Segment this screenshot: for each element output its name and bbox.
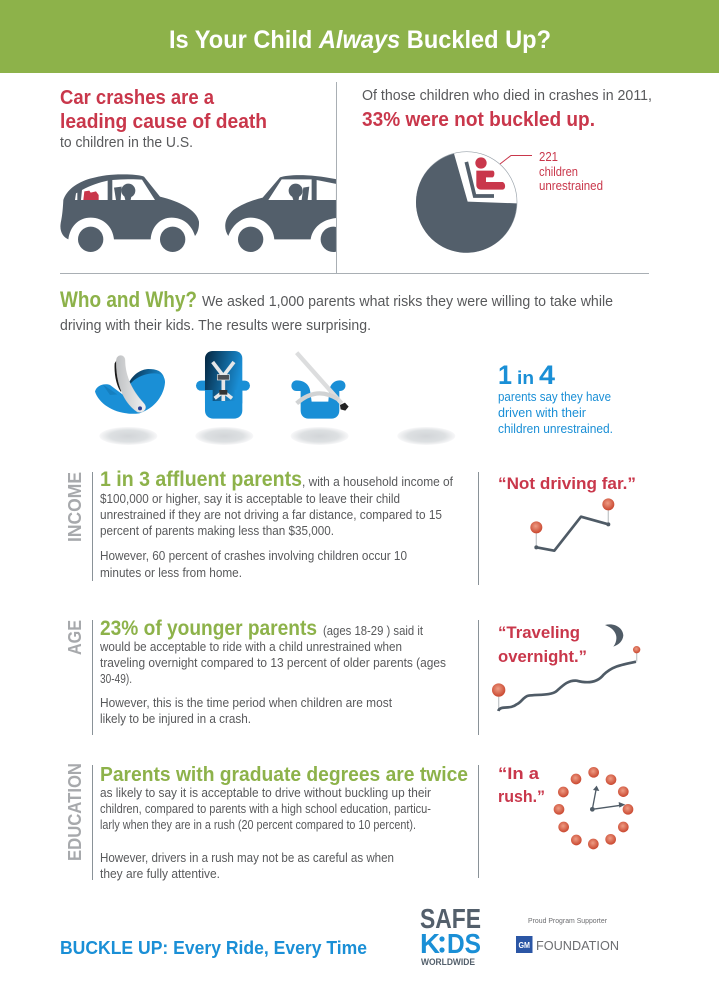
education text block: However, drivers in a rush may not be as careful as when [100,851,394,865]
quote: not driving far: “Not driving far.” [498,474,636,493]
panel: leading cause of death: Car crashes are a [60,87,215,109]
education text block: larly when they are in a rush (20 percent compared to 10 percent). [100,818,416,832]
icon: car with restrained driver [225,175,346,252]
income text block: 1 in 3 affluent parents [100,468,302,491]
income text block: percent of parents making less than $35,000. [100,524,334,538]
callout: 1 in 4 parents: 1 [498,360,512,390]
quote: traveling overnight: overnight.” [498,647,587,666]
income text block: $100,000 or higher, say it is acceptable to leave their child [100,492,400,506]
label: education: EDUCATION [65,763,85,861]
icon: infant carrier [95,355,165,414]
panel: age [65,617,640,735]
panel: leading cause of death [60,87,267,151]
age text block: However, this is the time period when children are most [100,696,393,710]
callout: 1 in 4 parents: 4 [539,360,555,390]
callout: 1 in 4 parents: children unrestrained. [498,422,613,436]
icon: short route [530,498,614,551]
logo: gm foundation: FOUNDATION [536,938,619,953]
icon: restrained child [466,157,505,196]
income text block: unrestrained if they are not driving a far distance, compared to 15 [100,508,442,522]
education text block [100,764,468,881]
age text block: likely to be injured in a crash. [100,712,251,726]
pie chart: 33 percent unrestrained [416,152,517,253]
education text block: they are fully attentive. [100,867,220,881]
logo: safe kids worldwide: K [420,928,440,959]
logo: safe kids worldwide: WORLDWIDE [421,957,475,968]
logo: gm foundation: GM [518,941,530,950]
callout: 221 children: children [539,165,578,179]
label: age: AGE [65,620,85,655]
panel: not buckled up statistic: Of those children who died in crashes in 2011, [362,87,652,104]
quote: traveling overnight [498,623,587,666]
logo: safe kids worldwide: SAFE [420,903,481,934]
icon: seat shadows [99,427,455,445]
callout: 1 in 4 parents: parents say they have [498,390,611,404]
tagline: buckle up: BUCKLE UP: Every Ride, Every Time [60,938,367,958]
quote: in a rush: rush.” [498,787,545,806]
callout: 1 in 4 parents: in [517,368,534,388]
income text block: However, 60 percent of crashes involving children occur 10 [100,549,407,563]
label: income: INCOME [65,472,85,542]
icon: forward-facing harness seat [196,351,250,419]
heading: who and why [60,287,613,334]
header banner [0,0,719,73]
panel: leading cause of death: to children in the U.S. [60,134,193,151]
quote: in a rush: “In a [498,764,540,783]
icon: clock of pins [554,767,633,849]
quote: in a rush [498,764,545,806]
logo: gm foundation: Proud Program Supporter [528,916,607,925]
callout: 1 in 4 parents [498,360,613,436]
age text block [99,617,446,726]
panel: not buckled up statistic [362,87,652,131]
logo: gm foundation [516,916,619,953]
age text block: traveling overnight compared to 13 percent of older parents (ages [100,656,446,670]
heading: who and why: We asked 1,000 parents what risks they were willing to take while [202,293,613,310]
heading: who and why: driving with their kids. The results were surprising. [60,317,371,334]
income text block [100,468,453,580]
quote: traveling overnight: “Traveling [498,623,580,642]
income text block: , with a household income of [302,475,453,489]
education text block: as likely to say it is acceptable to drive without buckling up their [100,786,431,800]
panel: income [65,468,636,585]
income text block: minutes or less from home. [100,566,242,580]
icon: booster seat with belt [291,353,349,419]
callout: 221 children: 221 [539,150,558,164]
callout: 1 in 4 parents: driven with their [498,406,586,420]
education text block: children, compared to parents with a high school education, particu- [100,802,431,816]
icon: cars [60,174,346,252]
icon: moon and long route [492,624,640,711]
divider: top panels [60,82,649,274]
age text block: would be acceptable to ride with a child unrestrained when [99,640,402,654]
title: Is Your Child Always Buckled Up? [169,26,551,54]
age text block: (ages 18-29 ) said it [323,624,423,638]
callout: 221 children: unrestrained [539,179,603,193]
panel: not buckled up statistic: 33% were not buckled up. [362,109,595,131]
age text block: 30-49). [100,672,132,686]
panel: education [65,763,633,881]
education text block: Parents with graduate degrees are twice [100,764,468,786]
logo: safe kids worldwide: DS [447,928,481,959]
logo: safe kids worldwide [420,903,481,968]
heading: who and why: Who and Why? [60,287,197,312]
callout: 221 children [500,150,603,193]
icon: car with unrestrained child [60,174,199,252]
panel: leading cause of death: leading cause of death [60,111,267,133]
car seat icons [95,351,455,445]
age text block: 23% of younger parents [100,617,317,640]
